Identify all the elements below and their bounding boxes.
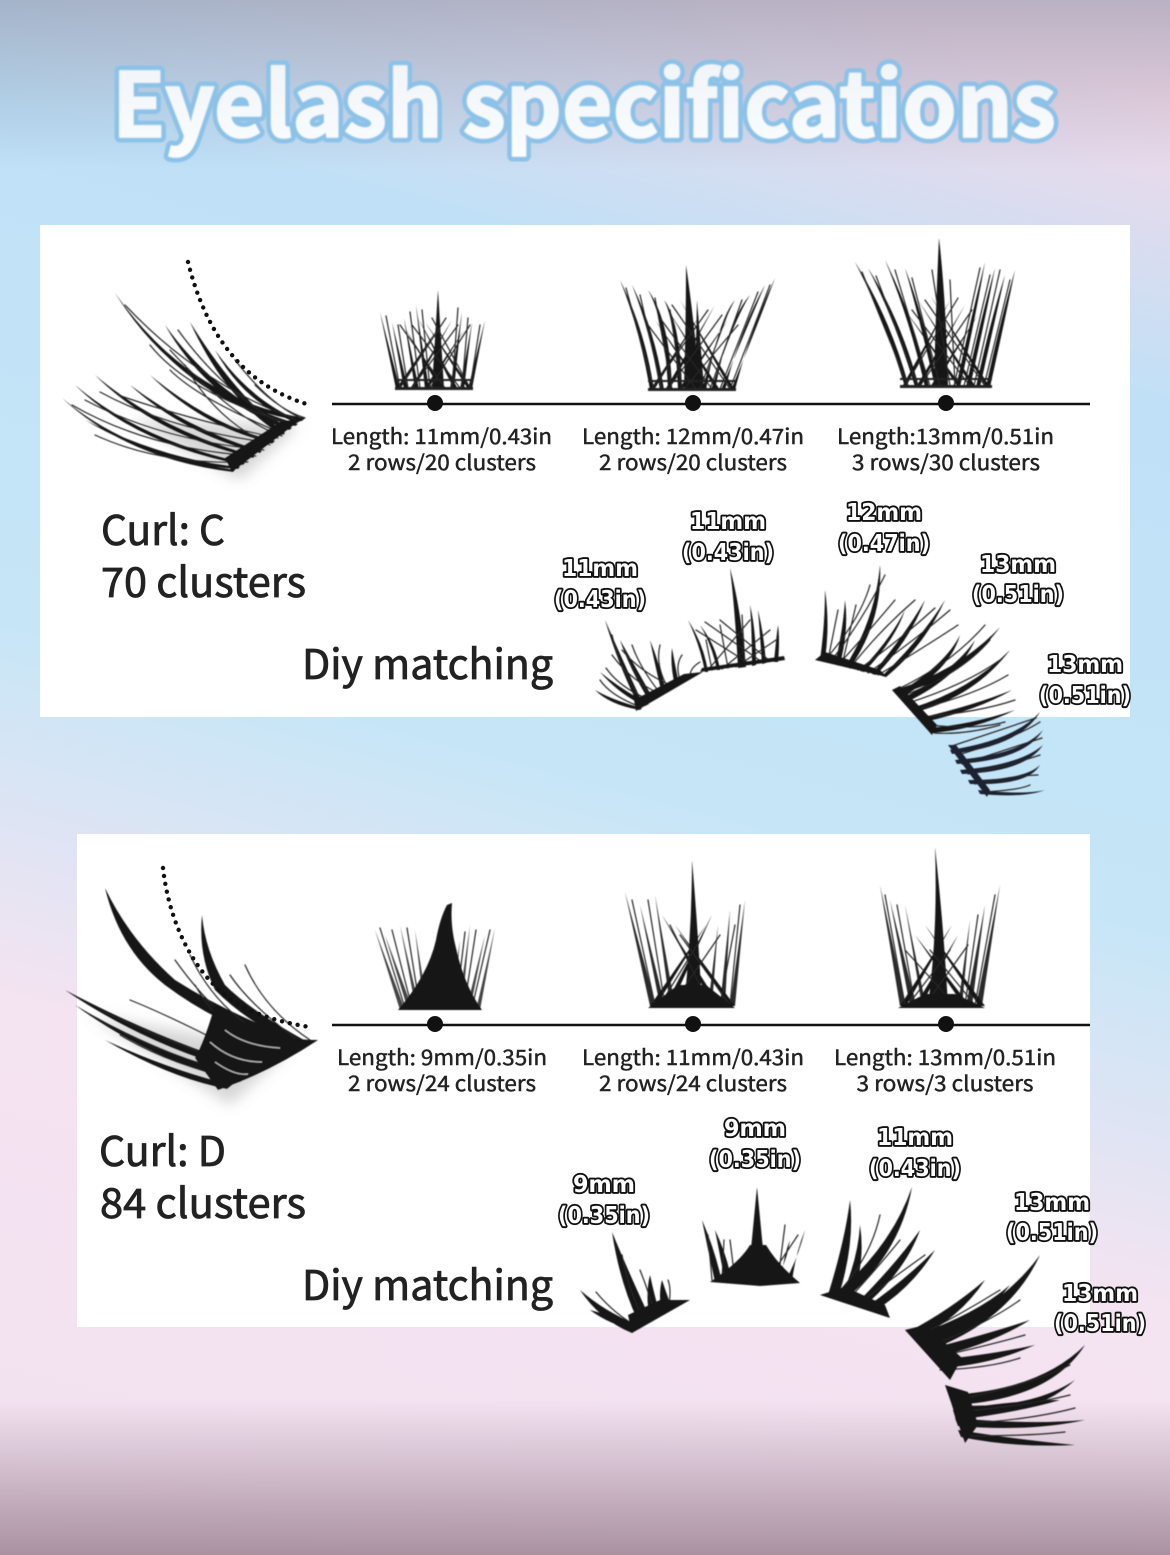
size callouts D: 13mm — [1014, 1190, 1090, 1216]
size callouts D: (0.43in) — [869, 1156, 961, 1182]
curl heading C: 70 clusters — [101, 549, 306, 609]
lash cluster 11mm — [380, 290, 485, 390]
spec labels D: 2 rows/24 clusters — [348, 1068, 536, 1098]
title: Eyelash specifications — [112, 34, 1056, 163]
curl heading C — [101, 497, 306, 609]
spec labels D: 2 rows/24 clusters — [599, 1068, 787, 1098]
panel: curl C — [40, 225, 1131, 797]
lash cluster 13mm D — [880, 847, 1000, 1008]
curl heading C: Curl: C — [101, 497, 225, 557]
panel background D — [77, 834, 1090, 1327]
size callouts C: 13mm — [980, 552, 1056, 578]
panel background C — [40, 225, 1130, 717]
side-view lash, curl C — [62, 293, 305, 480]
spec labels C: Length: 11mm/0.43in — [331, 421, 552, 451]
spec labels D: Length: 13mm/0.51in — [834, 1042, 1056, 1072]
side-view lash, curl D — [65, 888, 318, 1105]
dotted curl line C — [188, 262, 310, 405]
spec labels D: Length: 11mm/0.43in — [582, 1042, 804, 1072]
length axis C — [332, 395, 1090, 411]
lash cluster 12mm — [620, 265, 775, 391]
size callouts C — [554, 500, 1131, 709]
size callouts D: (0.35in) — [709, 1147, 801, 1173]
size callouts D: 9mm — [573, 1172, 635, 1198]
diy matching heading C: Diy matching — [302, 631, 553, 691]
lash cluster 9mm — [375, 903, 495, 1010]
size callouts D: (0.51in) — [1006, 1220, 1098, 1246]
diy lash set D — [580, 1187, 1085, 1446]
diy lash set C — [595, 565, 1045, 797]
size callouts D: 11mm — [877, 1125, 953, 1151]
background top shade — [0, 0, 1170, 170]
spec labels C — [331, 421, 1054, 477]
size callouts C: (0.43in) — [554, 587, 646, 613]
size callouts C: 13mm — [1047, 652, 1123, 678]
spec labels C: Length:13mm/0.51in — [837, 421, 1054, 451]
size callouts C: 11mm — [690, 509, 766, 535]
curl heading D: Curl: D — [99, 1118, 226, 1178]
spec labels C: 2 rows/20 clusters — [348, 447, 536, 477]
size callouts C: (0.47in) — [838, 531, 930, 557]
spec labels C: 3 rows/30 clusters — [852, 447, 1040, 477]
spec labels D: Length: 9mm/0.35in — [337, 1042, 547, 1072]
dotted curl line D — [163, 868, 310, 1027]
size callouts C: (0.43in) — [682, 540, 774, 566]
size callouts C: 11mm — [562, 556, 638, 582]
diy matching heading D: Diy matching — [302, 1252, 553, 1312]
spec labels D — [337, 1042, 1056, 1098]
size callouts C: 12mm — [846, 500, 922, 526]
spec labels C: Length: 12mm/0.47in — [582, 421, 804, 451]
length axis D — [332, 1016, 1090, 1032]
lash cluster 11mm D — [625, 860, 745, 1008]
spec labels D: 3 rows/3 clusters — [856, 1068, 1034, 1098]
spec labels C: 2 rows/20 clusters — [599, 447, 787, 477]
lash cluster 13mm — [855, 238, 1015, 388]
size callouts D: 13mm — [1062, 1281, 1138, 1307]
size callouts D: (0.35in) — [558, 1203, 650, 1229]
panel: curl D — [65, 834, 1146, 1446]
size callouts C: (0.51in) — [972, 582, 1064, 608]
size callouts D — [558, 1116, 1146, 1337]
curl heading D: 84 clusters — [100, 1170, 306, 1230]
size callouts D: (0.51in) — [1054, 1311, 1146, 1337]
background bottom shade — [0, 1400, 1170, 1555]
size callouts C: (0.51in) — [1039, 683, 1131, 709]
size callouts D: 9mm — [724, 1116, 786, 1142]
title: Eyelash specifications — [112, 34, 1056, 163]
curl heading D — [99, 1118, 306, 1230]
